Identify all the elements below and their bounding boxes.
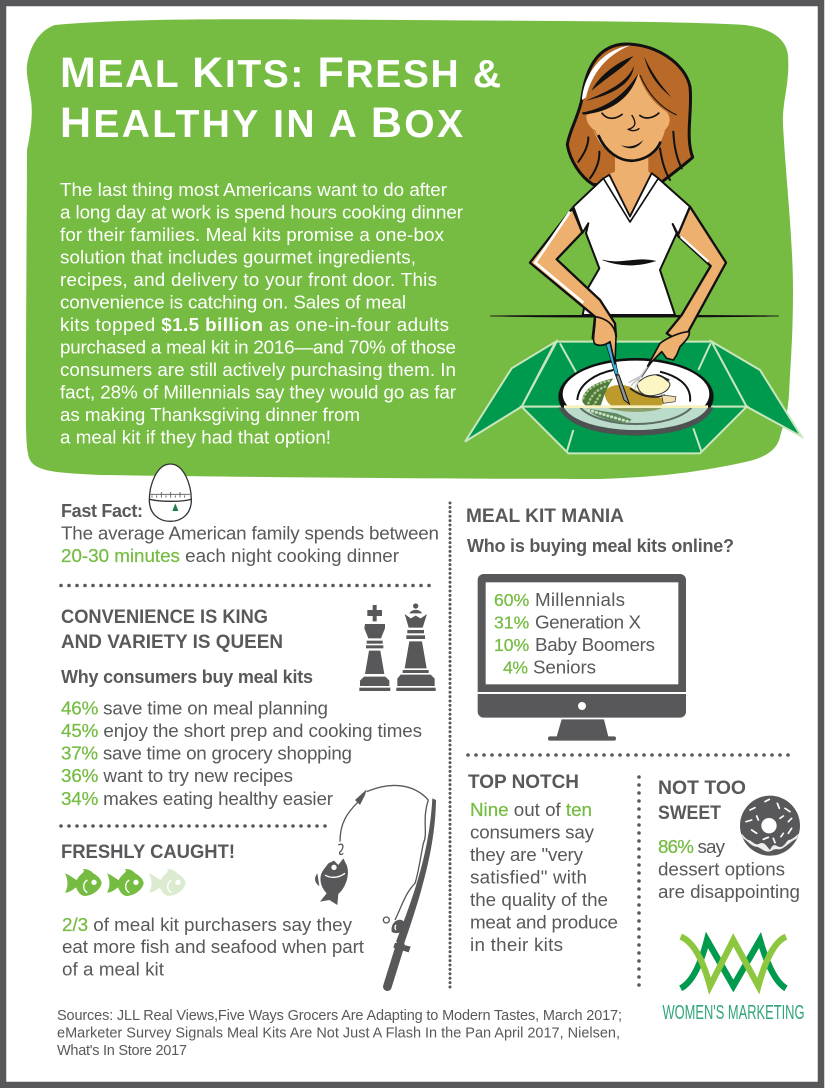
icon: arms: [530, 207, 726, 340]
title: HEALTHY IN A BOX: [60, 99, 463, 147]
icon: open meal kit box: [465, 342, 802, 453]
list of reasons: 34% makes eating healthy easier: [61, 788, 333, 809]
subheading: Who is buying meal kits online?: [467, 536, 734, 556]
text block: introduction: The last thing most Americans want to do after: [60, 179, 447, 200]
lower half of plate under the lid: [559, 405, 713, 435]
divider: [61, 584, 436, 587]
divider: [637, 777, 641, 989]
heading: [658, 778, 746, 824]
monitor text: buyer shares: Seniors: [533, 656, 596, 678]
text block: introduction: solution that includes gourmet ingredients,: [60, 246, 416, 268]
title: MEAL KITS: FRESH &: [60, 49, 501, 97]
icon: three fish, two of three highlighted: [65, 869, 186, 896]
logo: Women's Marketing: [662, 937, 804, 1024]
list of reasons: 46% save time on meal planning: [61, 698, 328, 718]
text block: introduction: for their families. Meal kits promise a one-box: [60, 224, 445, 245]
monitor text: buyer shares: 31%: [494, 612, 530, 632]
icon: neck: [603, 153, 657, 222]
text block: they are "very: [470, 844, 584, 865]
icon: donut: [740, 796, 800, 856]
heading: MEAL KIT MANIA: [466, 506, 624, 527]
text block: introduction: as making Thanksgiving dinner from: [60, 404, 360, 425]
list of reasons: 45% enjoy the short prep and cooking times: [61, 720, 422, 741]
text block: [470, 799, 618, 955]
text block: the quality of the: [470, 889, 608, 910]
heading: NOT TOO: [658, 778, 746, 799]
text block: satisfied" with: [470, 866, 587, 888]
illustration: woman cutting a meal over an open box: [465, 44, 802, 453]
text block: introduction: purchased a meal kit in 2016—and 70% of those: [60, 336, 456, 358]
icon: shirt: [573, 173, 690, 315]
heading: SWEET: [658, 803, 721, 824]
text block: meat and produce: [470, 912, 618, 932]
section: top notch: [468, 772, 618, 955]
icon: hair: [567, 44, 693, 185]
fast fact: Fast Fact:: [61, 501, 143, 521]
text block: introduction: recipes, and delivery to your front door. This: [60, 269, 437, 290]
monitor text: buyer shares: 4%: [503, 658, 528, 678]
section: freshly caught: [61, 785, 436, 987]
icon: hands: [594, 317, 689, 366]
fast fact: The average American family spends between: [61, 522, 439, 544]
heading: [61, 607, 283, 653]
subheading: Why consumers buy meal kits: [61, 667, 313, 687]
panel: green header: [26, 19, 802, 479]
section: convenience is king: [61, 603, 436, 809]
section: not too sweet: [658, 778, 800, 902]
icon: fish 2: [107, 869, 144, 896]
sources: What's In Store 2017: [57, 1043, 187, 1059]
text block: consumers say: [470, 822, 595, 842]
monitor text: buyer shares: Millennials: [535, 589, 625, 610]
sources: Sources: JLL Real Views,Five Ways Grocers Are Adapting to Modern Tastes, March 2017;: [57, 1008, 622, 1024]
monitor text: buyer shares: Generation X: [535, 612, 641, 632]
divider: [61, 824, 326, 828]
text block: [658, 836, 800, 902]
list of reasons: 37% save time on grocery shopping: [61, 742, 352, 764]
icon: fork: [629, 361, 653, 388]
divider: [448, 503, 452, 990]
icon: fish 1: [65, 869, 102, 896]
text block: introduction: fact, 28% of Millennials say they would go as far: [60, 382, 456, 402]
icon: table line: [490, 315, 779, 317]
icon: monitor: [478, 574, 686, 741]
fast fact: 20-30 minutes each night cooking dinner: [61, 545, 399, 566]
sources: eMarketer Survey Signals Meal Kits Are Not Just A Flash In the Pan April 2017, Nielsen,: [57, 1026, 620, 1042]
text block: introduction: convenience is catching on. Sales of meal: [60, 292, 406, 312]
title: [60, 49, 501, 147]
icon: chess king and queen: [359, 603, 436, 691]
monitor text: buyer shares: [494, 589, 655, 678]
monitor text: buyer shares: 60%: [494, 590, 530, 610]
icon: fish 3 faded: [149, 869, 186, 896]
icon: plate with food: [558, 358, 714, 435]
heading: TOP NOTCH: [468, 772, 579, 793]
text block: introduction: a long day at work is spend hours cooking dinner: [60, 202, 463, 222]
heading: CONVENIENCE IS KING: [61, 607, 268, 628]
text block: in their kits: [470, 934, 563, 955]
logo mark: [681, 937, 786, 988]
text block: [62, 914, 365, 980]
heading: AND VARIETY IS QUEEN: [61, 632, 283, 653]
icon: face: [578, 56, 682, 180]
sources: [57, 1008, 622, 1059]
text block: of a meal kit: [62, 958, 165, 980]
divider: [468, 753, 791, 757]
text block: introduction: kits topped $1.5 billion as one-in-four adults: [60, 314, 449, 335]
text block: Nine out of ten: [470, 799, 592, 820]
text block: dessert options: [658, 858, 785, 880]
list of reasons: [61, 698, 422, 809]
text block: introduction: consumers are still actively purchasing them. In: [60, 359, 456, 380]
monitor text: buyer shares: 10%: [494, 635, 530, 655]
icon: knife: [606, 343, 629, 404]
text block: 86% say: [658, 836, 726, 857]
icon: fishing rod and fish: [315, 785, 436, 987]
monitor text: buyer shares: Baby Boomers: [535, 634, 655, 655]
text block: are disappointing: [658, 881, 800, 902]
text block: introduction: a meal kit if they had that option!: [60, 426, 331, 448]
heading: FRESHLY CAUGHT!: [61, 842, 235, 863]
icon: egg timer: [149, 464, 191, 521]
text block: 2/3 of meal kit purchasers say they: [62, 914, 353, 935]
text block: introduction: [60, 179, 463, 448]
list of reasons: 36% want to try new recipes: [61, 765, 293, 786]
fast fact: [61, 501, 439, 566]
section: meal kit mania: [466, 506, 734, 741]
text block: eat more fish and seafood when part: [62, 936, 365, 957]
